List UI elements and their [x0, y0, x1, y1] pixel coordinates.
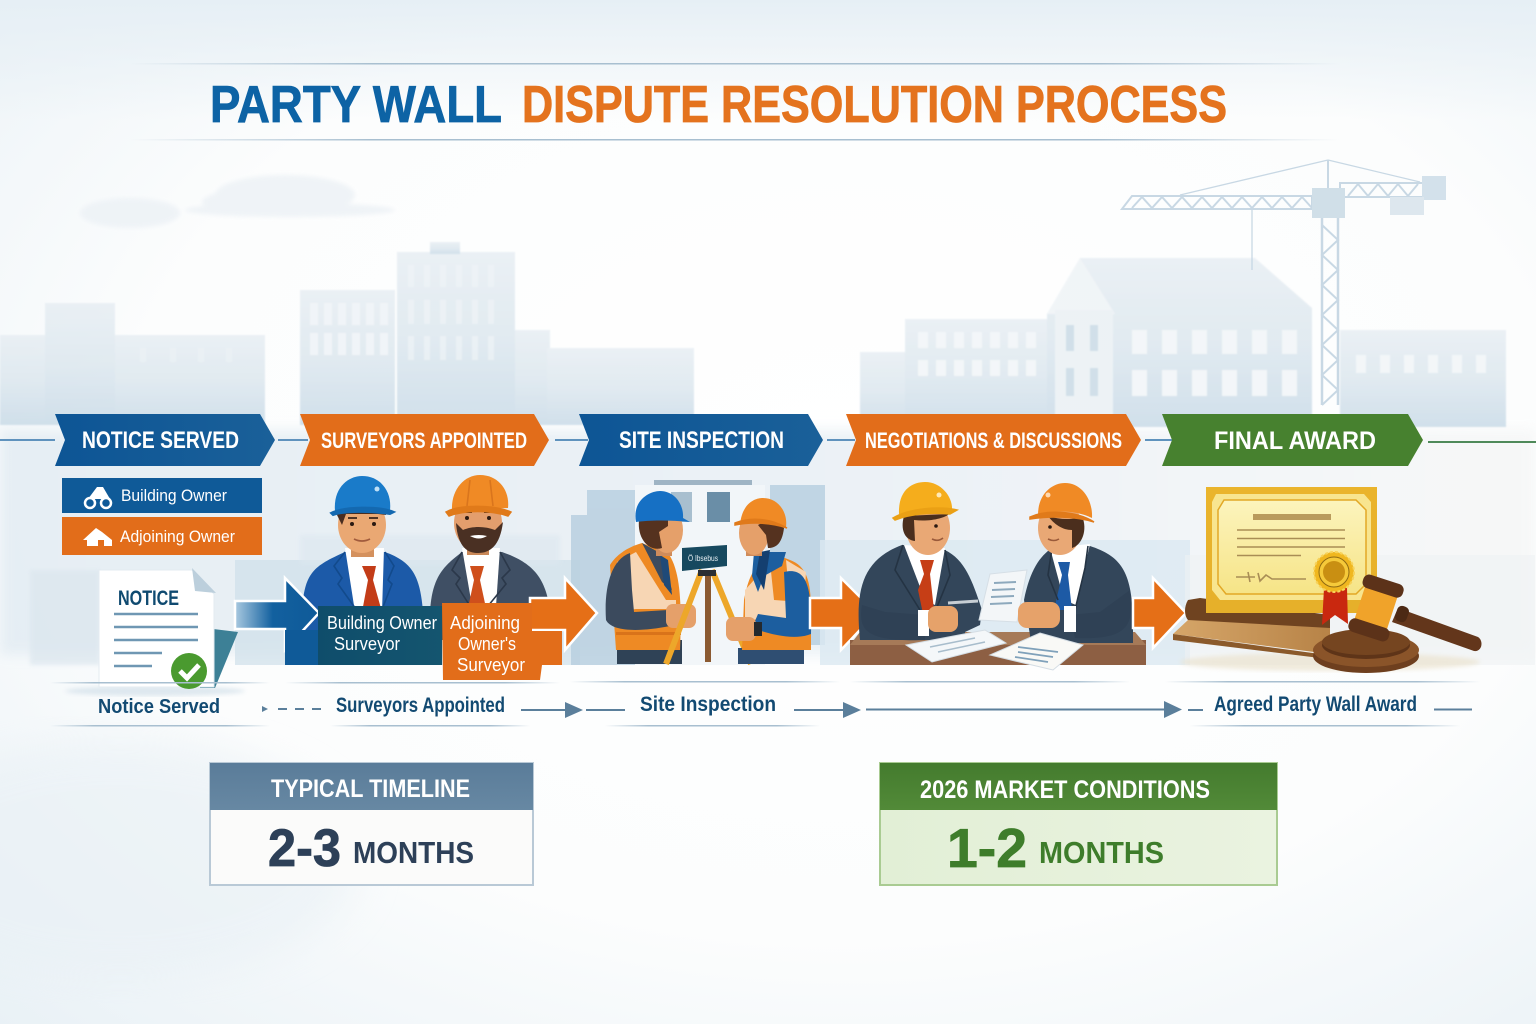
- caption: notice served: Notice Served: [98, 696, 220, 718]
- person: inspector left: [606, 491, 696, 664]
- panel: 2026 market conditions: [880, 763, 1277, 885]
- seal and ribbon: [1314, 552, 1354, 625]
- certificate: [1206, 487, 1377, 613]
- arrow: blue notice to surveyors: [235, 578, 319, 665]
- sound block: [1313, 629, 1419, 673]
- background tower crane: [1122, 160, 1446, 405]
- caption: surveyors appointed: Surveyors Appointed: [336, 694, 505, 717]
- wooden base: [1173, 598, 1330, 658]
- panel: typical timeline: [210, 763, 533, 885]
- gavel: [1347, 573, 1481, 651]
- caption: adjoining owner surveyor: Owner's: [458, 634, 516, 654]
- table with papers: [850, 632, 1146, 665]
- label: building owner: [62, 478, 262, 513]
- caption: building owner surveyor: Building Owner: [327, 613, 437, 633]
- arrow: orange surveyors to inspection: [530, 578, 597, 650]
- panel: typical timeline: TYPICAL TIMELINE: [271, 775, 470, 803]
- caption: agreed party wall award: Agreed Party Wall Award: [1214, 693, 1417, 716]
- step banner: negotiations and discussions: [846, 414, 1141, 466]
- panel: typical timeline: MONTHS: [353, 835, 474, 870]
- step banner: surveyors appointed: SURVEYORS APPOINTED: [321, 428, 527, 453]
- person: building owner surveyor: [302, 476, 423, 640]
- caption: building owner surveyor: Surveyor: [334, 634, 400, 654]
- icon: document held between negotiators: [979, 570, 1027, 622]
- icon: survey tripod: [666, 545, 751, 664]
- caption: adjoining owner surveyor: [442, 603, 562, 680]
- background clouds: [80, 175, 395, 228]
- panel: 2026 market conditions: 2026 MARKET CONDITIONS: [920, 776, 1210, 804]
- label: building owner: Building Owner: [121, 486, 227, 505]
- owner labels: [62, 478, 262, 555]
- caption: adjoining owner surveyor: Adjoining: [450, 613, 520, 633]
- caption: building owner surveyor: [318, 606, 442, 665]
- arrow: orange inspection to negotiations: [810, 578, 876, 650]
- person: inspector right: [726, 498, 811, 664]
- panel: 2026 market conditions: MONTHS: [1039, 835, 1164, 870]
- bottom timeline arrows: [262, 701, 1472, 718]
- background skyline left: [0, 242, 694, 425]
- title: DISPUTE RESOLUTION PROCESS: [522, 76, 1227, 134]
- step banner: negotiations and discussions: NEGOTIATIONS & DISCUSSIONS: [865, 428, 1122, 453]
- icon: notice document: NOTICE: [118, 587, 179, 610]
- arrow: orange negotiations to award: [1133, 578, 1186, 648]
- icon: award certificate and gavel: [1173, 487, 1481, 673]
- label: adjoining owner: [62, 517, 262, 555]
- caption: adjoining owner surveyor: Surveyor: [457, 655, 525, 675]
- caption rule lines: [50, 681, 1480, 726]
- title: [130, 63, 1340, 140]
- icon: notice document: [65, 568, 245, 696]
- label: adjoining owner: Adjoining Owner: [120, 527, 235, 546]
- panel: typical timeline: 2-3: [268, 819, 341, 878]
- icon: survey tripod: Ö Ibsebus: [688, 554, 718, 563]
- step banner: notice served: NOTICE SERVED: [82, 427, 239, 454]
- background skyline right: [860, 258, 1506, 427]
- title: PARTY WALL: [210, 76, 502, 134]
- step banner: site inspection: SITE INSPECTION: [619, 427, 784, 454]
- papers on table: [906, 630, 1083, 670]
- step banner: surveyors appointed: [300, 414, 549, 466]
- illustration backdrop skyline: [30, 480, 1535, 665]
- step banner: final award: FINAL AWARD: [1214, 427, 1376, 455]
- step banner: site inspection: [579, 414, 823, 466]
- timeline connector line: [0, 440, 1536, 442]
- step banner: notice served: [55, 414, 275, 466]
- person: negotiator right: [1018, 483, 1133, 643]
- person: negotiator left: [859, 482, 982, 640]
- step banner: final award: [1162, 414, 1423, 466]
- panel: 2026 market conditions: 1-2: [947, 817, 1027, 879]
- person: adjoining owner surveyor: [430, 475, 550, 640]
- caption: site inspection: Site Inspection: [640, 693, 776, 716]
